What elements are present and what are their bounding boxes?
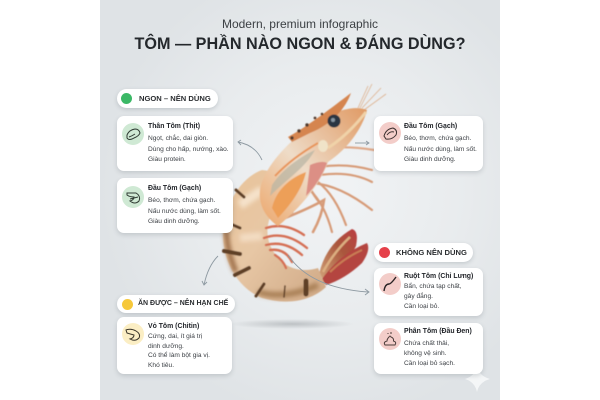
- antennae: [358, 84, 386, 110]
- icon: waste: [379, 328, 401, 350]
- card: phan tom: [374, 323, 483, 374]
- card: dau tom right: Giàu dinh dưỡng.: [404, 156, 456, 163]
- card: ruot tom: Cần loại bỏ.: [404, 303, 439, 310]
- card: vo tom: Khó tiêu.: [148, 362, 174, 369]
- ground shadow: [230, 319, 354, 329]
- eye: [328, 114, 340, 128]
- card: phan tom: Chứa chất thải,: [404, 340, 449, 347]
- antenna base: [328, 112, 366, 148]
- swimmerets: [264, 226, 307, 268]
- card: phan tom: Phân Tôm (Đầu Đen): [404, 328, 472, 335]
- card: dau tom right: [374, 116, 483, 171]
- pill: ngon: NGON – NÊN DÙNG: [139, 94, 211, 102]
- title: TÔM — PHẦN NÀO NGON & ĐÁNG DÙNG?: [135, 35, 465, 53]
- background panel: [100, 0, 500, 400]
- card: dau tom green: [117, 178, 233, 233]
- icon: shrimp head: [122, 186, 144, 208]
- icon: shrimp head red: [379, 122, 401, 144]
- rostrum: [288, 93, 351, 142]
- card: phan tom: Cần loại bỏ sạch.: [404, 360, 455, 367]
- icon: vein: [379, 273, 401, 295]
- card: dau tom green: Béo, thơm, chứa gạch.: [148, 197, 215, 204]
- pill: ngon: [117, 89, 218, 108]
- card: vo tom: dinh dưỡng.: [148, 343, 184, 350]
- tail fan: [319, 229, 357, 281]
- arrows: [202, 140, 369, 295]
- card: vo tom: [117, 317, 232, 374]
- sparkle: [465, 366, 490, 392]
- card: than tom: [117, 116, 233, 171]
- card: dau tom green: Nấu nước dùng, làm sốt.: [148, 208, 221, 215]
- card: than tom: Thân Tôm (Thịt): [148, 123, 200, 130]
- card: than tom: Dùng cho hấp, nướng, xào.: [148, 146, 229, 153]
- card: dau tom right: Đầu Tôm (Gạch): [404, 123, 457, 130]
- card: vo tom: Có thể làm bột gia vị.: [148, 352, 210, 359]
- walking legs: [285, 147, 374, 232]
- subtitle: Modern, premium infographic: [222, 17, 378, 31]
- pill: khong nen dung: KHÔNG NÊN DÙNG: [396, 248, 467, 256]
- pill: an duoc: [117, 295, 235, 313]
- icon: meat: [122, 123, 144, 145]
- pill: khong nen dung: [374, 243, 473, 262]
- card: than tom: Ngọt, chắc, dai giòn.: [148, 135, 208, 142]
- card: ruot tom: [374, 268, 483, 316]
- card: dau tom green: Đầu Tôm (Gạch): [148, 185, 201, 192]
- body shading: [226, 190, 318, 295]
- card: phan tom: không vệ sinh.: [404, 350, 447, 357]
- card: than tom: Giàu protein.: [148, 156, 186, 163]
- body segment stripes: [224, 190, 306, 297]
- curled body: [223, 170, 326, 302]
- card: ruot tom: gây đắng.: [404, 293, 433, 300]
- rostrum teeth: [290, 113, 323, 140]
- icon: shell: [122, 323, 144, 345]
- carapace: [260, 108, 367, 226]
- card: dau tom right: Béo, thơm, chứa gạch.: [404, 135, 471, 142]
- card: dau tom right: Nấu nước dùng, làm sốt.: [404, 146, 477, 153]
- card: ruot tom: Ruột Tôm (Chỉ Lưng): [404, 273, 473, 280]
- card: vo tom: Cứng, dai, ít giá trị: [148, 333, 202, 340]
- card: vo tom: Vỏ Tôm (Chitin): [148, 323, 199, 330]
- pill: an duoc: ĂN ĐƯỢC – NÊN HẠN CHẾ: [138, 300, 228, 307]
- card: dau tom green: Giàu dinh dưỡng.: [148, 218, 200, 225]
- card: ruot tom: Bẩn, chứa tạp chất,: [404, 283, 462, 290]
